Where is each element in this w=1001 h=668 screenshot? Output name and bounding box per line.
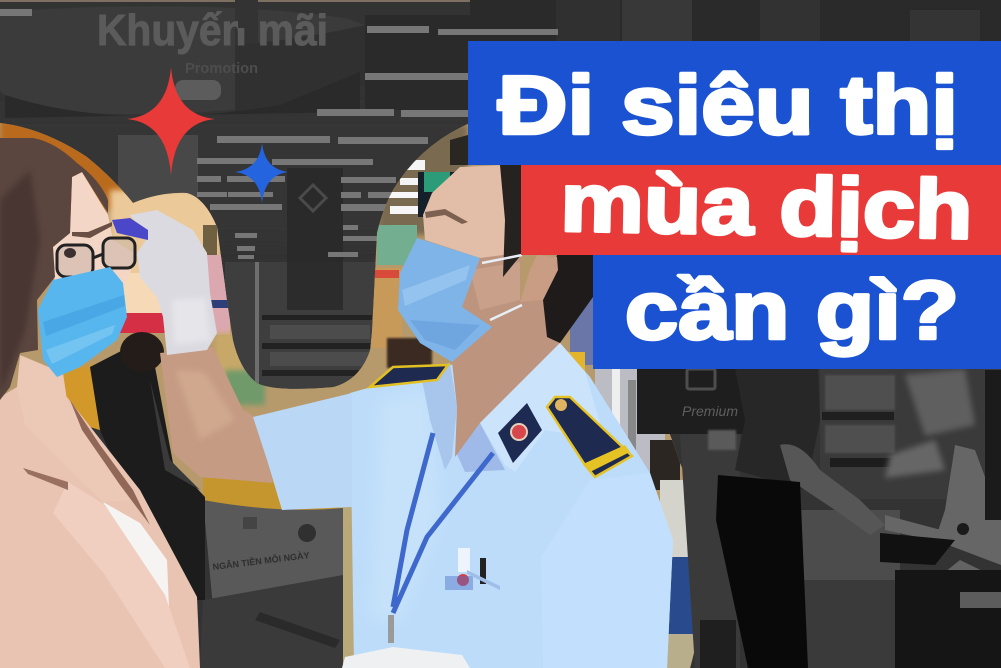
grayscale checkout scene: Premium bbox=[682, 403, 738, 419]
sign post bbox=[238, 0, 256, 28]
mask bbox=[398, 238, 492, 362]
hair bbox=[450, 135, 468, 165]
title bar: line 1 bbox=[468, 41, 1001, 165]
mask straps bbox=[482, 255, 522, 320]
left collar shade bbox=[420, 363, 457, 470]
store sign: Khuyến mãi: Khuyến mãi bbox=[97, 6, 328, 55]
lapel bbox=[53, 482, 190, 668]
collar bbox=[480, 343, 605, 472]
store sign: Khuyến mãi bbox=[97, 6, 328, 77]
inspector's raised arm and glove bbox=[112, 210, 273, 483]
title line 3: cần gì? bbox=[625, 264, 959, 356]
head bbox=[423, 165, 505, 258]
inspector bbox=[253, 135, 673, 668]
neck and cheek bbox=[452, 255, 560, 457]
shirt bbox=[350, 343, 673, 668]
title bar: line 2 bbox=[521, 165, 1001, 255]
pocket items and logo bbox=[458, 548, 470, 572]
store sign: Khuyến mãi: Promotion bbox=[185, 60, 258, 77]
lapel shadow bbox=[70, 400, 150, 525]
star: small blue bbox=[235, 143, 288, 203]
right epaulette bbox=[547, 397, 632, 477]
eye bbox=[64, 248, 76, 258]
jacket bbox=[0, 387, 200, 668]
dark figure behind bbox=[90, 332, 205, 600]
eyebrow and eye bbox=[425, 209, 468, 224]
collar badge bbox=[498, 403, 542, 463]
woman with mask bbox=[0, 138, 200, 668]
grayscale lower-centre sign: NGÂN TIỀN MỖI NGÀY bbox=[212, 549, 310, 572]
left epaulette bbox=[370, 365, 448, 387]
title block bbox=[468, 41, 1001, 369]
ear bbox=[520, 255, 558, 302]
ceiling lights bbox=[0, 9, 558, 259]
grayscale lower-centre sign bbox=[200, 500, 343, 668]
thermometer bbox=[112, 218, 148, 240]
glasses bbox=[57, 238, 135, 277]
inner shirt bbox=[103, 502, 170, 632]
eyebrow bbox=[72, 222, 112, 238]
title line 2: mùa dịch bbox=[560, 156, 973, 256]
title line 1: Đi siêu thị bbox=[498, 58, 958, 152]
neck and chest bbox=[17, 355, 133, 502]
face bbox=[53, 172, 137, 295]
grayscale checkout scene bbox=[637, 369, 1001, 668]
star: large red bbox=[127, 67, 215, 175]
lanyard bbox=[393, 433, 493, 613]
hair bbox=[0, 138, 108, 400]
title bar: line 3 bbox=[593, 255, 1001, 369]
face mask bbox=[38, 267, 127, 377]
open collar bbox=[455, 423, 505, 472]
colour photo store backdrop bbox=[0, 120, 710, 668]
grayscale centre shelf panel bbox=[225, 262, 380, 397]
white paper bbox=[342, 647, 470, 668]
